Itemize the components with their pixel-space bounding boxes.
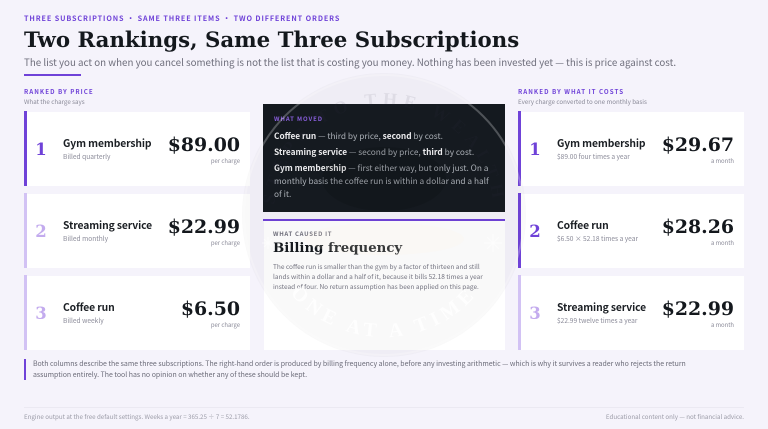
- title: Two Rankings, Same Three Subscriptions: [24, 28, 519, 53]
- card: gym membership by price: 1: [35, 140, 47, 159]
- card: coffee run by cost: 2: [529, 222, 541, 241]
- what moved lines: [274, 130, 489, 200]
- explanation text: lands within a dollar and a half of it, because it bills 52.18 times a year: [273, 271, 483, 281]
- card: gym membership by price: $89.00: [168, 134, 240, 156]
- subtitle: The list you act on when you cancel something is not the list that is costing you money. Nothing has been invested yet — this is price against cost.: [24, 55, 676, 69]
- card: streaming service by price: per charge: [211, 238, 240, 247]
- what moved lines: of it.: [274, 188, 291, 200]
- what moved lines: Streaming service — second by price, third by cost.: [274, 146, 474, 158]
- card: streaming service by cost: 3: [529, 304, 541, 323]
- card: gym membership by cost: Gym membership: [557, 135, 645, 150]
- card: gym membership by cost: $29.67: [662, 134, 734, 156]
- card: coffee run by price: 3: [35, 304, 47, 323]
- card: coffee run by cost: Coffee run: [557, 217, 609, 232]
- what caused it label: WHAT CAUSED IT: [273, 229, 332, 238]
- card: gym membership by cost: 1: [529, 140, 541, 159]
- what moved lines: Gym membership — first either way, but only just. On a: [274, 162, 488, 174]
- right column heading: [518, 87, 647, 106]
- explanation text: instead of four. No return assumption has been applied on this page.: [273, 281, 479, 291]
- card: streaming service by price: 2: [35, 222, 47, 241]
- right column heading: Every charge converted to one monthly basis: [518, 97, 647, 106]
- card: gym membership by price: Billed quarterly: [63, 151, 110, 161]
- left column heading: [24, 87, 94, 106]
- watermark seal: STEPS TO THE WEALTH: [275, 93, 486, 184]
- watermark seal: ONE AT A TIME: [297, 287, 464, 290]
- card: streaming service by price: [24, 194, 250, 268]
- card: gym membership by price: Gym membership: [63, 135, 151, 150]
- footer: Engine output at the free default settings. Weeks a year = 365.25 ÷ 7 = 52.1786.: [24, 412, 250, 421]
- footnote callout: Both columns describe the same three subscriptions. The right-hand order is produced by billing frequency alone, before any investing arithmetic — which is why it survives a reader who rejects the return: [33, 359, 686, 369]
- panel accent rule: [263, 219, 505, 221]
- card: coffee run by cost: $6.50 × 52.18 times a year: [557, 233, 638, 243]
- card: coffee run by price: Coffee run: [63, 299, 115, 314]
- card: coffee run by cost: a month: [711, 238, 734, 247]
- card: coffee run by cost: $28.26: [662, 216, 734, 238]
- card: coffee run by price: [24, 276, 250, 350]
- card: gym membership by price: per charge: [211, 156, 240, 165]
- panel: what moved: [263, 104, 505, 212]
- card: coffee run by cost: [518, 194, 744, 268]
- explanation text: [273, 261, 483, 291]
- card: streaming service by price: Billed monthly: [63, 233, 108, 243]
- what moved lines: Coffee run — third by price, second by cost.: [274, 130, 443, 142]
- footnote callout: [24, 359, 686, 380]
- card: coffee run by price: per charge: [211, 320, 240, 329]
- card: streaming service by cost: Streaming service: [557, 299, 646, 314]
- billing frequency heading: Billing frequency: [273, 241, 402, 256]
- card: streaming service by cost: a month: [711, 320, 734, 329]
- eyebrow: THREE SUBSCRIPTIONS · SAME THREE ITEMS · TWO DIFFERENT ORDERS: [24, 14, 340, 24]
- card: gym membership by cost: [518, 112, 744, 186]
- left column heading: What the charge says: [24, 97, 85, 106]
- card: gym membership by cost: a month: [711, 156, 734, 165]
- footer: Educational content only — not financial advice.: [606, 412, 744, 421]
- footer: [24, 407, 744, 426]
- watermark seal: [263, 92, 521, 290]
- panel: what caused it: [264, 219, 505, 350]
- card: gym membership by price: [24, 112, 250, 186]
- what moved lines: monthly basis the coffee run is within a dollar and a half: [274, 175, 489, 187]
- title accent rule: [24, 74, 81, 76]
- card: coffee run by price: Billed weekly: [63, 315, 104, 325]
- explanation text: The coffee run is smaller than the gym by a factor of thirteen and still: [273, 261, 480, 271]
- card: gym membership by cost: $89.00 four times a year: [557, 151, 630, 161]
- card: streaming service by price: $22.99: [168, 216, 240, 238]
- card: streaming service by price: Streaming service: [63, 217, 152, 232]
- card: coffee run by price: $6.50: [181, 298, 240, 320]
- card: streaming service by cost: $22.99 twelve times a year: [557, 315, 637, 325]
- card: streaming service by cost: [518, 276, 744, 350]
- left column heading: RANKED BY PRICE: [24, 87, 94, 96]
- footnote callout: assumption entirely. The tool has no opinion on whether any of these should be kept.: [33, 370, 307, 380]
- what moved label: WHAT MOVED: [274, 114, 323, 123]
- right column heading: RANKED BY WHAT IT COSTS: [518, 87, 624, 96]
- card: streaming service by cost: $22.99: [662, 298, 734, 320]
